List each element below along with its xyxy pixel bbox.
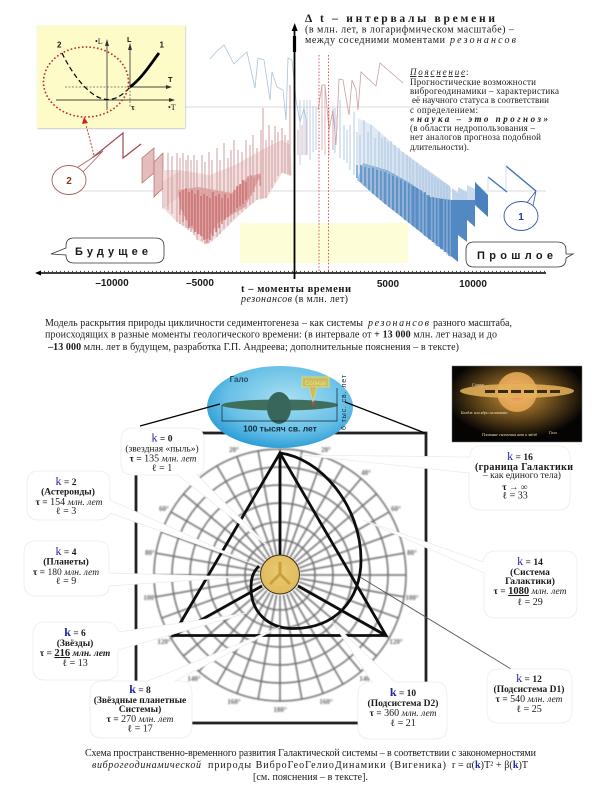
axis tick labels: 10000 — [459, 279, 487, 290]
polar grid: 80° — [407, 549, 417, 557]
polar grid: 160° — [319, 698, 333, 706]
polar grid: 40° — [361, 469, 371, 477]
connector lines from halo to frame — [140, 402, 425, 433]
callout: k = 8: τ = 270 млн. лет — [107, 714, 174, 725]
callout: future: Будущее — [75, 246, 148, 258]
triangle and spokes — [173, 453, 386, 636]
explanatory note: (в области недропользования – — [410, 123, 536, 133]
galaxy photo — [452, 366, 582, 442]
inset labels: T — [168, 75, 173, 84]
polar grid: 100° — [405, 594, 419, 602]
polar grid: 160° — [227, 698, 241, 706]
callout: k = 14: (Система — [510, 567, 550, 578]
square frame — [136, 433, 426, 723]
caption: galactic system scheme: r = α(k)T² + β(k)T — [452, 760, 528, 771]
axis tick labels — [95, 278, 487, 290]
pale red upper curve — [318, 63, 403, 145]
sun marker — [302, 377, 329, 406]
callout: k = 14 — [363, 520, 577, 618]
galaxy halo ellipse — [207, 366, 353, 448]
caption: cyclic model — [45, 318, 512, 353]
callout: k = 2: k = 2 — [56, 474, 77, 488]
inset labels: τ — [131, 103, 135, 112]
callout: k = 10 — [333, 623, 447, 739]
callout: k = 0: k = 0 — [152, 430, 173, 444]
curve 1 — [130, 53, 159, 87]
callout: k = 2: (Астероиды) — [41, 486, 95, 498]
inset axes — [56, 42, 174, 110]
callout: k = 8: ℓ = 17 — [127, 724, 153, 734]
polar grid: 120° — [157, 638, 171, 646]
galactic bulge — [267, 392, 291, 424]
inset labels — [57, 35, 176, 112]
callout: k = 6: (Звёзды) — [57, 638, 93, 649]
caption: galactic system scheme: виброгеодинамической — [92, 760, 201, 771]
callout: k = 16: – как единого тела) — [482, 470, 561, 481]
axis tick labels: –10000 — [95, 278, 129, 289]
callout: k = 4: (Планеты) — [43, 556, 89, 568]
callout: future — [51, 238, 164, 263]
horizontal time axis — [35, 270, 546, 276]
callout: k = 6: ℓ = 13 — [62, 658, 88, 669]
callout: k = 6 — [33, 613, 247, 680]
explanatory note: её научного статуса в соответствии — [412, 95, 549, 105]
callout: k = 10: k = 10 — [390, 685, 416, 699]
marker 2 — [52, 151, 103, 194]
callout: k = 4: τ = 180 млн. лет — [33, 568, 99, 578]
inset labels: •T — [168, 103, 176, 112]
inset labels: •L — [95, 37, 103, 46]
explanatory note: Пояснение — [409, 67, 465, 77]
heading: delta t axis title: между соседними моментами — [305, 35, 446, 46]
callout: k = 8: (Звёздные планетные — [94, 695, 186, 706]
callout: k = 14: k = 14 — [517, 554, 543, 568]
horizontal reference lines — [80, 107, 546, 191]
spiral arc — [251, 453, 361, 629]
central mixed oscillations — [298, 85, 337, 165]
caption: galactic system scheme: Схема пространственно-временного развития Галактической системы – в соответствии с закономерностями — [85, 748, 537, 759]
inset labels: 1 — [160, 40, 164, 50]
marker 1: 1 — [518, 212, 524, 223]
callout: k = 12: k = 12 — [516, 671, 542, 685]
caption: galactic system scheme: природы ВиброГеоГелиоДинамики (Вигеника) — [208, 760, 446, 771]
polar grid: 140° — [187, 675, 201, 683]
callout: k = 4 — [24, 541, 240, 596]
horizontal axis title: резонансов — [240, 294, 293, 305]
callout: past: Прошлое — [477, 250, 553, 262]
caption: cyclic model: –13 000 млн. лет в будущем, разработка Г.П. Андреева; дополнительные пояснения – в тексте) — [47, 342, 459, 353]
explanatory note: «наука – это прогноз» — [410, 114, 548, 124]
polar grid: 180° — [273, 706, 287, 714]
heading: delta t axis title: Δ t – интервалы времени — [305, 13, 495, 25]
caption: cyclic model: Модель раскрытия природы цикличности седиментогенеза — [45, 318, 300, 329]
callout: k = 8: k = 8 — [129, 682, 151, 696]
callout: k = 12: (Подсистема D1) — [494, 684, 564, 695]
callout: k = 0 — [121, 428, 270, 548]
callout: k = 0: ℓ = 1 — [152, 463, 172, 474]
halo label: Гало — [230, 375, 248, 384]
polar grid: 80° — [145, 549, 155, 557]
callout: k = 14: τ = 1080 млн. лет — [494, 586, 567, 597]
marker 1 — [504, 191, 538, 230]
explanatory note: Прогностические возможности — [410, 77, 536, 87]
caption: cyclic model: резонансов — [367, 318, 430, 329]
callout: k = 16: (граница Галактики — [475, 462, 573, 473]
callout: k = 16: τ → ∞ — [502, 483, 528, 493]
explanatory note: : — [466, 67, 469, 77]
polar grid: 140° — [359, 675, 373, 683]
caption: cyclic model: происходящих в разные моменты геологического времени: (в интервале от + 13 000 млн. лет назад и до — [45, 330, 497, 340]
caption: cyclic model: – как системы — [301, 318, 363, 329]
heading: delta t axis title: резонансов — [449, 35, 517, 46]
marker 2: 2 — [66, 176, 72, 187]
callout: k = 16: k = 16 — [507, 449, 533, 463]
callout: k = 4: k = 4 — [56, 544, 77, 558]
horizontal axis title: (в млн. лет) — [295, 294, 348, 305]
axis tick labels: 5000 — [377, 279, 400, 290]
red series: future side — [92, 85, 292, 245]
polar grid: 100° — [143, 594, 157, 602]
galactic disk — [222, 400, 338, 410]
inset labels: L — [127, 35, 132, 44]
inset: curves 1 and 2 — [37, 26, 185, 128]
galaxy photo: Балдж или ядро галактики — [460, 410, 507, 415]
explanatory note — [409, 67, 559, 152]
vertical interval axis — [292, 23, 298, 279]
width label: 100 тысяч св. лет — [243, 424, 317, 434]
callout: k = 14: Галактики) — [505, 576, 555, 587]
blue series: past side — [335, 100, 536, 262]
polar grid: 60° — [159, 505, 169, 513]
yellow highlight band — [240, 223, 408, 263]
galaxy photo: Плотные скопления газа и звёзд — [481, 432, 537, 437]
callout: k = 14: ℓ = 29 — [517, 597, 543, 608]
callout: k = 10: τ = 360 млн. лет — [370, 708, 437, 719]
red dotted resonance markers — [319, 55, 328, 273]
galaxy photo: Гало — [548, 430, 557, 435]
callout: k = 6: k = 6 — [64, 625, 86, 639]
explanatory note: длительности). — [410, 142, 469, 152]
diagram: polar grid frame with triangle — [136, 433, 426, 723]
horizontal axis title: t – моменты времени — [241, 284, 351, 295]
callout: k = 8 — [90, 627, 280, 738]
caption: galactic system scheme: [см. пояснения – в тексте]. — [253, 772, 368, 783]
polar grid: 20° — [229, 446, 239, 454]
callout: k = 2: ℓ = 3 — [56, 506, 76, 517]
arrow from marker 2 to inset — [82, 117, 94, 155]
polar grid — [143, 446, 419, 714]
pale blue upper curve — [210, 45, 306, 122]
callout: k = 12 — [360, 577, 572, 723]
chart: resonance intervals over time — [35, 23, 546, 290]
sun marker: Солнце — [305, 381, 327, 387]
polar grid: 60° — [391, 505, 401, 513]
axis tick labels: –5000 — [186, 278, 214, 289]
explanatory note: с определением: — [410, 105, 478, 115]
explanatory note: нет аналогов прогноза подобной — [410, 132, 541, 142]
central sun — [260, 555, 300, 594]
callout: k = 0: τ = 135 млн. лет — [130, 454, 197, 464]
callout: past — [466, 242, 573, 267]
galaxy photo: Солнце — [472, 382, 484, 387]
callout: k = 12: τ = 540 млн. лет — [496, 694, 563, 705]
curve 2 dashed — [62, 53, 130, 100]
heading: delta t axis title — [305, 13, 517, 46]
caption: cyclic model: разного масштаба, — [433, 318, 512, 329]
red dotted circle — [44, 47, 128, 117]
callout: k = 2 — [27, 471, 250, 563]
heading: delta t axis title: (в млн. лет, в логарифмическом масштабе) – — [305, 24, 515, 36]
caption: galactic system scheme — [85, 748, 537, 783]
height label: 6 тыс. св. лет — [341, 374, 348, 430]
explanatory note: виброгеодинамики – характеристика — [410, 86, 559, 96]
callout: k = 12: ℓ = 25 — [516, 704, 542, 715]
callout: k = 4: ℓ = 9 — [56, 576, 76, 587]
horizontal axis title — [240, 284, 351, 305]
callout: k = 8: Системы) — [119, 704, 161, 715]
size dimension lines — [222, 388, 337, 421]
callout: k = 2: τ = 154 млн. лет — [36, 497, 103, 508]
callout: k = 6: τ = 216 млн. лет — [40, 648, 110, 659]
callout: k = 16: ℓ = 33 — [502, 490, 528, 502]
inset labels: 2 — [57, 40, 62, 50]
polar grid: 20° — [321, 446, 331, 454]
polar grid: 40° — [189, 469, 199, 477]
callout: k = 0: (звездная «пыль») — [125, 444, 199, 454]
callout: k = 10: (Подсистема D2) — [368, 698, 438, 709]
polar grid: 120° — [389, 638, 403, 646]
callout: k = 16 — [300, 446, 573, 510]
callout: k = 10: ℓ = 21 — [390, 718, 416, 729]
